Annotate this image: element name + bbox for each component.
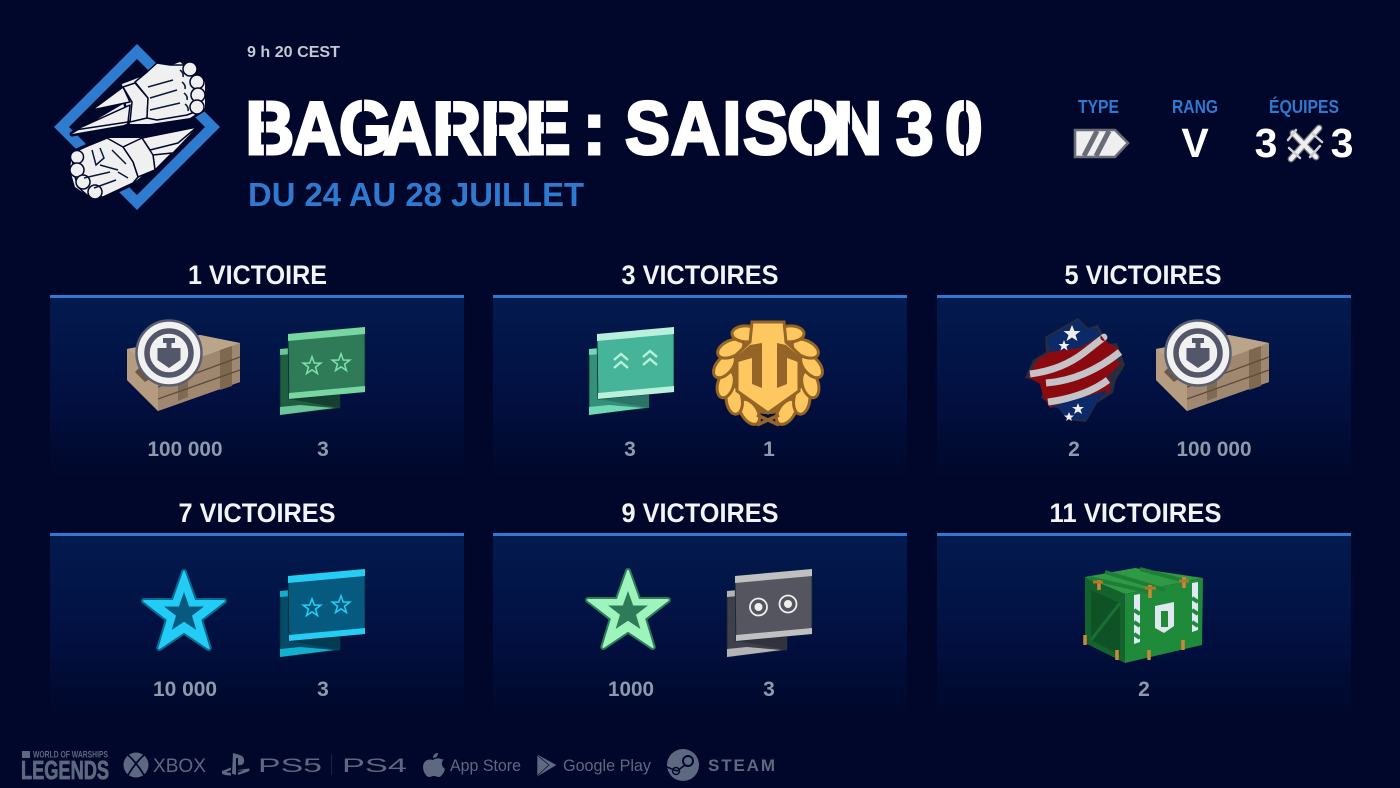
logo: PlayStation: PS5 <box>258 756 322 777</box>
icon: green crate <box>1085 568 1203 663</box>
logo: Google Play: Google Play <box>563 756 651 775</box>
value: 3 <box>624 438 636 461</box>
title: BAGARRE : SAISON 30 <box>246 87 983 171</box>
footer: platform logos <box>21 749 775 785</box>
type block: TYPE <box>1078 97 1119 117</box>
icon: teal chevron ribbon <box>589 327 674 415</box>
value: 100 000 <box>148 438 222 461</box>
panel: 5 victoires <box>937 260 1351 478</box>
teams block: 3 <box>1331 120 1353 166</box>
value: 100 000 <box>1176 438 1252 461</box>
panel: 3 victoires <box>493 260 907 478</box>
panel: 11 victoires <box>937 498 1351 716</box>
value: 1000 <box>608 678 654 701</box>
icon: gray coin ribbon <box>727 569 812 657</box>
logo: crossed gauntlets in diamond <box>54 44 220 210</box>
icon: golden laurel emblem <box>708 314 828 432</box>
rank block: V <box>1181 120 1209 166</box>
value: 2 <box>1138 678 1150 701</box>
teams block: 3 <box>1255 120 1277 166</box>
icon: green star ribbon <box>280 327 365 415</box>
logo: PlayStation <box>222 753 408 777</box>
panel: 1 victoire <box>50 260 464 478</box>
icon: type arrow <box>1075 130 1128 157</box>
heading: 9 VICTOIRES <box>622 498 778 528</box>
subtitle dates: DU 24 AU 28 JUILLET <box>248 176 584 213</box>
rank block: RANG <box>1172 97 1218 117</box>
value: 1 <box>763 438 775 461</box>
logo: World of Warships Legends: LEGENDS <box>21 755 109 785</box>
heading: 5 VICTOIRES <box>1064 260 1222 290</box>
icon: american flag camouflage <box>1025 318 1125 422</box>
rank block <box>1172 97 1218 166</box>
logo: Xbox <box>124 752 206 778</box>
logo: World of Warships Legends <box>21 750 109 785</box>
heading: 1 VICTOIRE <box>188 260 327 290</box>
icon: blue star ribbon <box>280 569 365 657</box>
value: 10 000 <box>153 678 217 701</box>
time label: 9 h 20 CEST <box>247 44 340 61</box>
type block <box>1075 97 1128 157</box>
value: 2 <box>1068 438 1080 461</box>
teams block: ÉQUIPES <box>1269 96 1339 117</box>
value: 3 <box>763 678 775 701</box>
heading: 11 VICTOIRES <box>1050 498 1222 528</box>
icon: green star <box>588 571 668 647</box>
heading: 7 VICTOIRES <box>178 498 336 528</box>
logo: Steam: STEAM <box>708 756 775 775</box>
logo: App Store: App Store <box>450 756 521 775</box>
icon: blue star <box>144 572 224 648</box>
panel: 9 victoires <box>493 498 907 716</box>
logo: App Store <box>423 753 521 777</box>
value: 3 <box>317 678 329 701</box>
icon: credits crate <box>1156 320 1269 411</box>
panel: 7 victoires <box>50 498 464 716</box>
logo: World of Warships Legends: WORLD OF WARSHIPS <box>33 750 108 760</box>
value: 3 <box>317 438 329 461</box>
heading: 3 VICTOIRES <box>622 260 778 290</box>
logo: PlayStation: PS4 <box>342 756 408 777</box>
logo: Xbox: XBOX <box>153 756 206 777</box>
icon: credits crate <box>127 320 240 411</box>
icon: crossed swords <box>1288 128 1322 159</box>
logo: Google Play <box>537 754 651 777</box>
logo: Steam <box>667 749 775 781</box>
teams block <box>1255 96 1353 166</box>
